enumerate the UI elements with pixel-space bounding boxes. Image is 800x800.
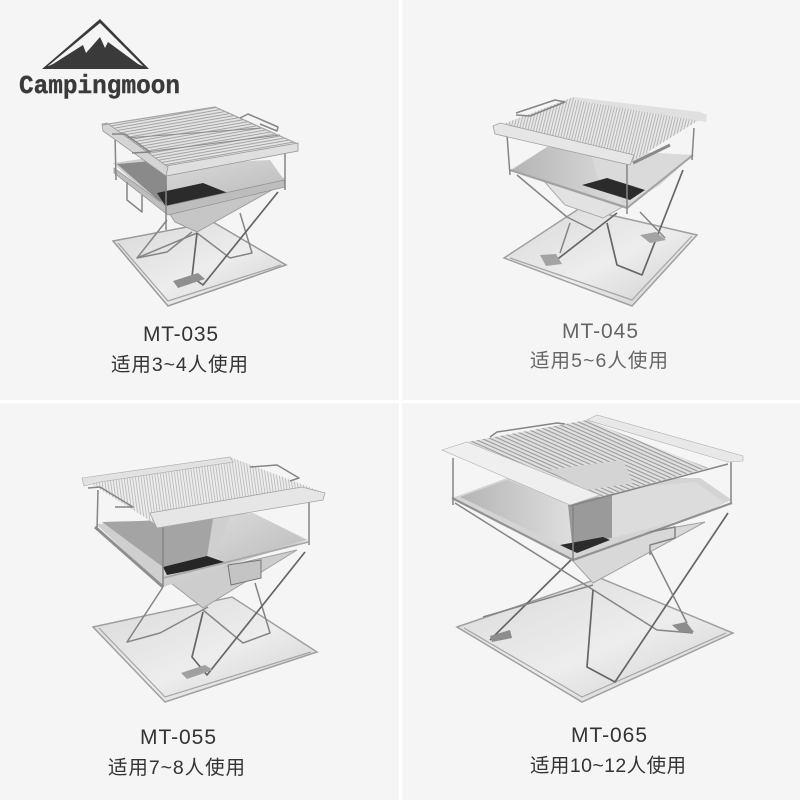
product: grill MT-055 <box>82 457 325 702</box>
bowl <box>167 550 297 608</box>
base plate <box>93 597 317 702</box>
bowl front <box>543 180 624 218</box>
frame <box>493 97 707 165</box>
tray right wall <box>165 160 284 197</box>
wordmark: Campingmoon <box>19 71 180 101</box>
base plate <box>457 578 733 702</box>
black grid <box>163 556 227 575</box>
capacity: 适用5~6人使用 <box>530 350 668 372</box>
frame <box>82 457 325 528</box>
model: MT-035 <box>143 323 218 346</box>
tray right wall <box>215 513 305 563</box>
rim <box>510 155 693 208</box>
side handle <box>127 182 142 212</box>
side handle <box>650 527 675 555</box>
black grid <box>560 537 610 553</box>
posts <box>97 490 309 587</box>
panel: MT-035 <box>102 107 298 376</box>
legs <box>455 503 728 682</box>
product: grill MT-035 <box>102 107 298 306</box>
side handle <box>228 560 261 585</box>
icon: mountain <box>42 19 149 69</box>
top handles <box>112 114 278 153</box>
rim <box>452 498 732 560</box>
panel: MT-045 <box>493 97 707 372</box>
bowl <box>560 522 705 583</box>
tray body <box>452 478 732 560</box>
black grid <box>582 178 645 200</box>
cooking grate <box>102 107 298 172</box>
posts <box>115 135 285 230</box>
top handle <box>490 423 565 437</box>
tray center <box>568 493 612 543</box>
top handles <box>88 465 299 507</box>
product: grill MT-065 <box>442 415 743 702</box>
grate cross bars <box>125 128 280 152</box>
rim <box>114 168 285 215</box>
tray body <box>510 147 693 208</box>
tray left wall <box>460 480 572 545</box>
rim <box>95 527 163 587</box>
capacity: 适用3~4人使用 <box>111 354 248 376</box>
top handles <box>516 100 670 163</box>
base plate <box>504 208 697 306</box>
product: grill MT-045 <box>493 97 707 306</box>
panel: MT-055 <box>82 457 325 779</box>
model: MT-055 <box>140 726 216 749</box>
tray back <box>113 152 285 212</box>
cooking grate <box>82 457 325 525</box>
legs <box>127 552 305 679</box>
frame <box>102 107 298 176</box>
legs <box>517 170 683 275</box>
bowl <box>166 186 279 232</box>
cooking grate <box>493 97 707 163</box>
cooking grate <box>467 420 708 497</box>
view through grate <box>547 460 633 490</box>
tray left wall <box>117 160 168 205</box>
black grid <box>157 183 233 213</box>
logo: Campingmoon <box>19 19 180 101</box>
tray left wall <box>102 519 213 567</box>
tray right wall <box>610 482 725 538</box>
capacity: 适用10~12人使用 <box>530 755 686 777</box>
model: MT-045 <box>562 320 638 343</box>
capacity: 适用7~8人使用 <box>108 757 245 779</box>
tray right wall <box>590 150 693 203</box>
posts <box>453 458 731 560</box>
base plate <box>113 222 286 306</box>
posts <box>507 128 694 214</box>
panel: MT-065 <box>442 415 743 777</box>
tray body <box>96 513 308 587</box>
model: MT-065 <box>571 724 647 747</box>
frame <box>442 415 743 506</box>
tray interior <box>512 147 627 208</box>
legs <box>137 192 278 288</box>
